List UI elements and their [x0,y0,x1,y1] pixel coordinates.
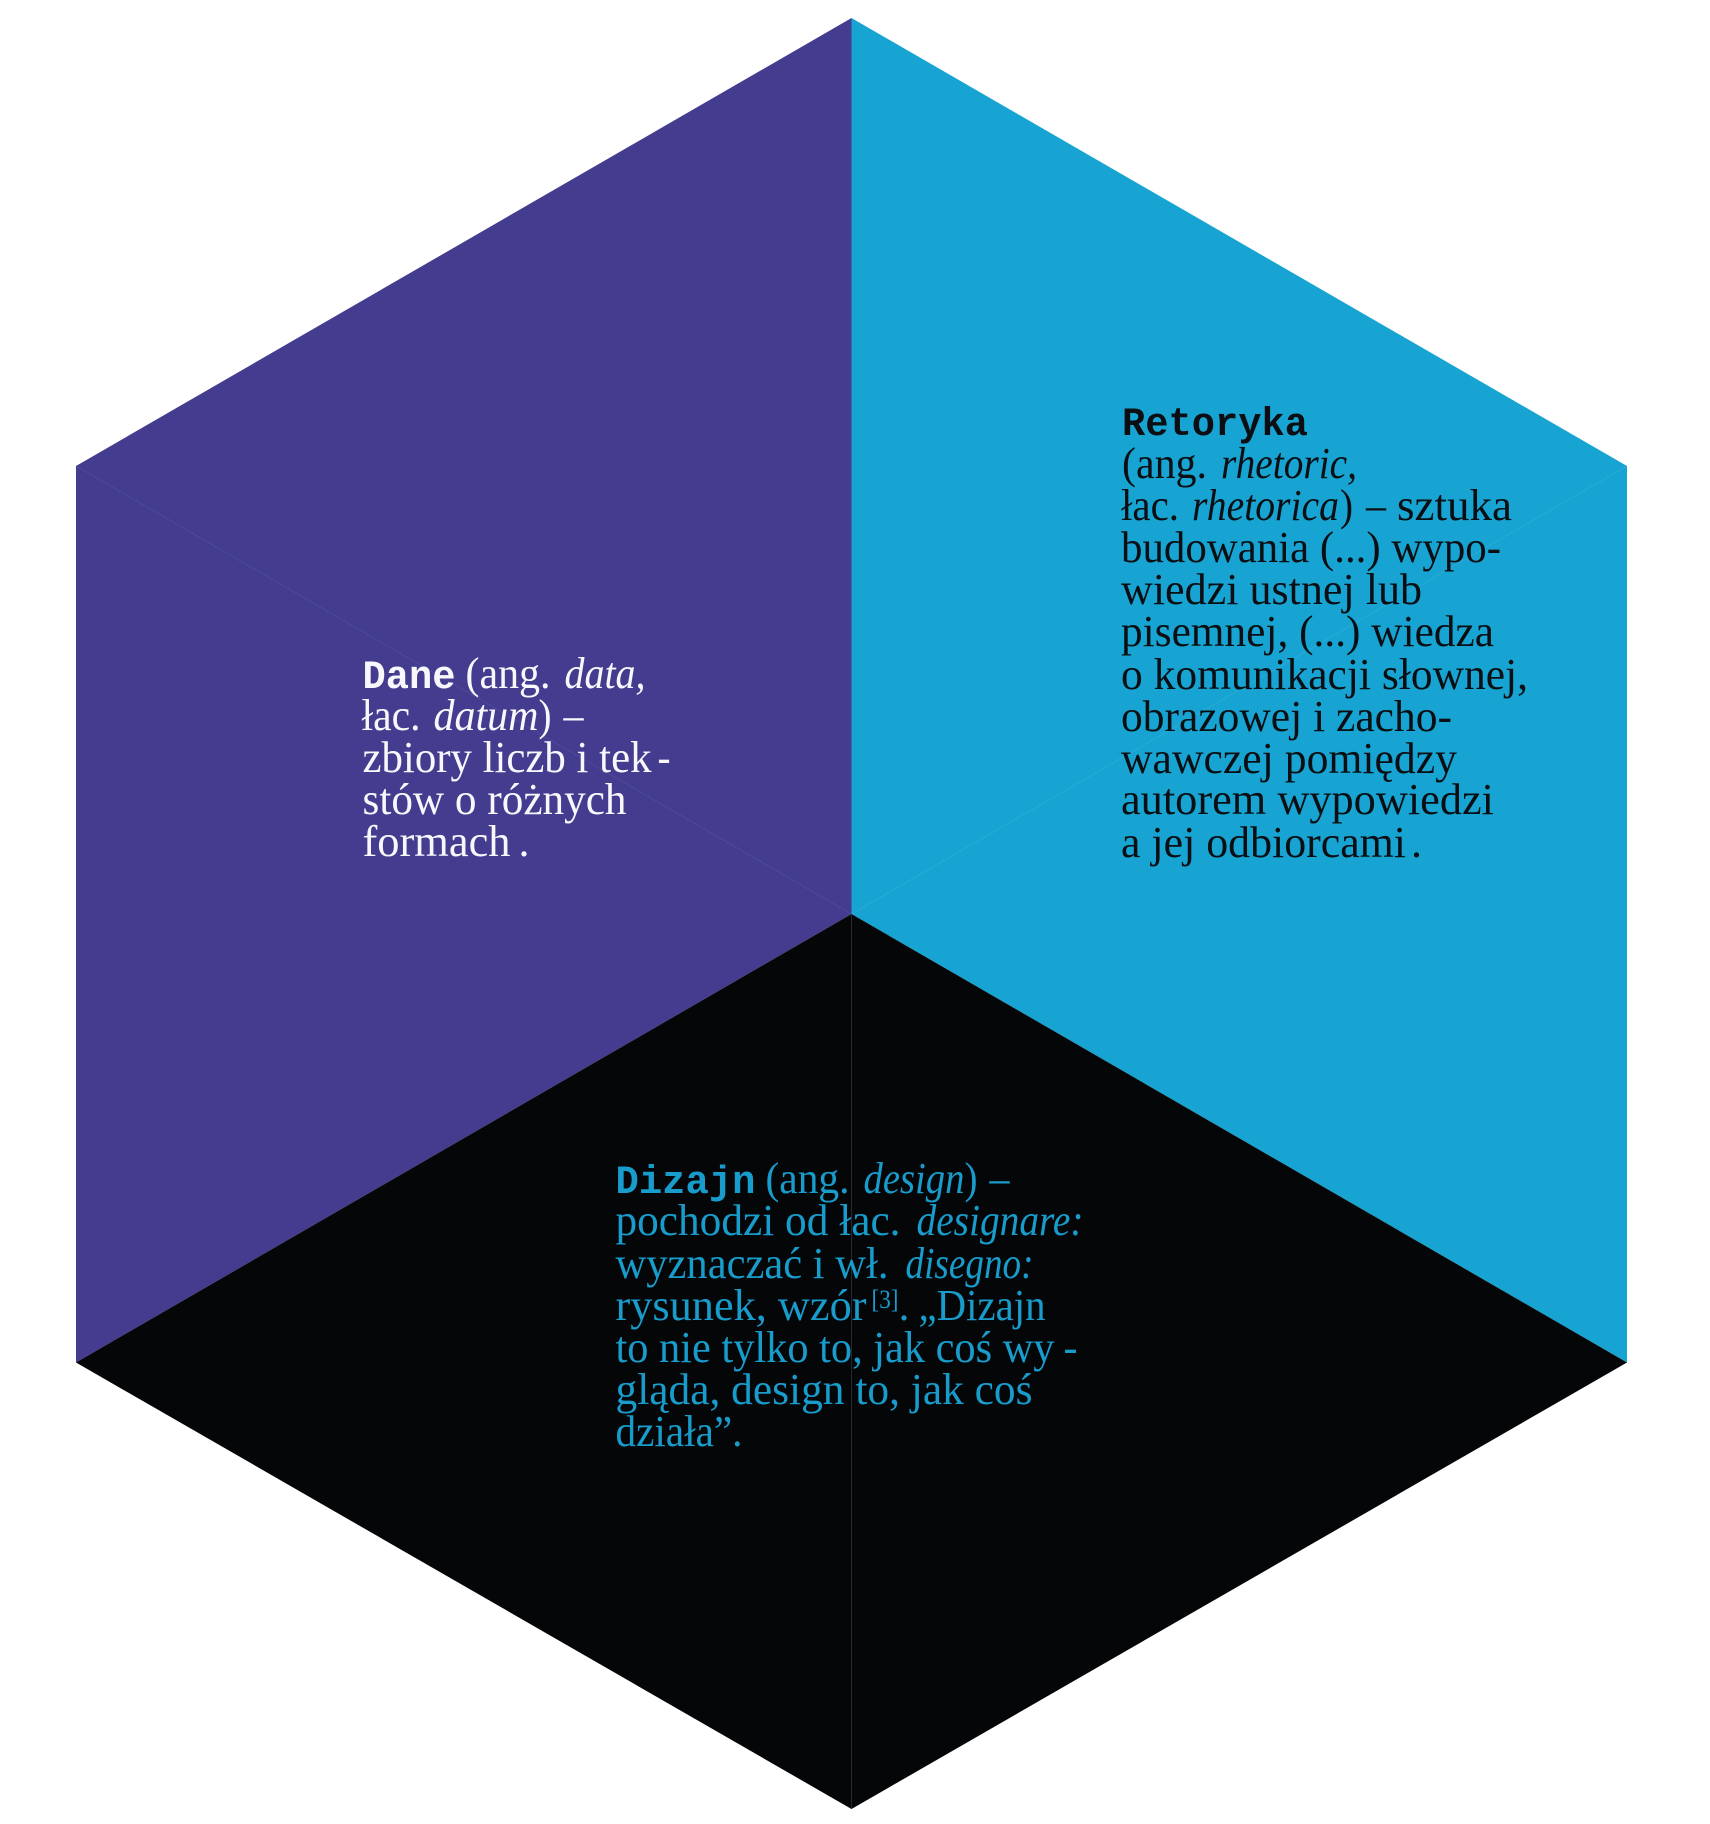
text block: Retoryka definition: . [1411,818,1422,867]
text block: Dane definition: ) [538,691,552,740]
heading: Retoryka: Retoryka [1122,403,1308,448]
text block: Dizajn definition: designare: [916,1196,1084,1245]
text block: Dizajn definition [616,1154,1084,1456]
text block: Dizajn definition: wyznaczać i wł. [616,1239,888,1288]
heading: Dizajn: Dizajn [616,1161,756,1206]
heading: Dane: Dane [362,656,456,701]
text block: Dizajn definition: - [1064,1323,1078,1372]
text block: Retoryka definition [1121,403,1528,867]
text block: Dizajn definition: (ang. [766,1154,850,1203]
text block: Dane definition: (ang. [466,649,550,698]
text block: Retoryka definition: o komunikacji słownej, [1121,650,1528,699]
text block: Retoryka definition: ) [1340,481,1353,530]
text block: Dane definition: - [658,733,670,782]
text block: Retoryka definition: pisemnej, (...) wiedza [1121,607,1494,656]
text block: Retoryka definition: rhetoric, [1221,439,1357,488]
text block: Dizajn definition: . [898,1281,910,1330]
text block: Retoryka definition: sztuka [1397,481,1512,530]
text block: Retoryka definition: (ang. [1122,439,1207,488]
text block: Retoryka definition: rhetorica [1192,481,1339,530]
text block: Dizajn definition: ) [964,1154,978,1203]
text block: Retoryka definition: łac. [1121,481,1179,530]
text block: Retoryka definition: – [1365,481,1387,530]
text block: Dizajn definition: disegno: [906,1239,1034,1288]
text block: Dizajn definition: [3] [872,1285,898,1314]
text block: Dizajn definition: „Dizajn [918,1281,1046,1330]
text block: Dizajn definition: pochodzi od łac. [616,1196,900,1245]
text block: Retoryka definition: wawczej pomiędzy [1121,734,1457,783]
text block: Dizajn definition: to nie tylko to, jak coś wy [616,1323,1054,1372]
text block: Dane definition: datum [434,691,538,740]
text block: Dizajn definition: rysunek, wzór [616,1281,867,1330]
panel: Retoryka [852,18,1627,1362]
text block: Retoryka definition: budowania (...) wypo- [1121,523,1501,572]
text block: Dizajn definition: – [989,1154,1010,1203]
text block: Dane definition: . [518,817,530,866]
text block: Dane definition: formach [362,817,510,866]
text block: Dane definition: łac. [362,691,420,740]
text block: Retoryka definition: wiedzi ustnej lub [1121,565,1422,614]
text block: Dizajn definition: design [864,1154,964,1203]
text block: Retoryka definition: a jej odbiorcami [1121,818,1406,867]
text block: Retoryka definition: autorem wypowiedzi [1121,775,1494,824]
text block: Dizajn definition: gląda, design to, jak coś [616,1365,1032,1414]
text block: Dane definition [362,649,670,866]
text block: Dizajn definition: działa”. [616,1407,742,1456]
text block: Dane definition: – [563,691,584,740]
text block: Dane definition: data, [564,649,646,698]
text block: Retoryka definition: obrazowej i zacho- [1121,692,1452,741]
text block: Dane definition: zbiory liczb i tek [362,733,652,782]
panel: Dane [76,18,852,1362]
text block: Dane definition: stów o różnych [362,775,626,824]
panel: Dizajn [76,914,1627,1809]
